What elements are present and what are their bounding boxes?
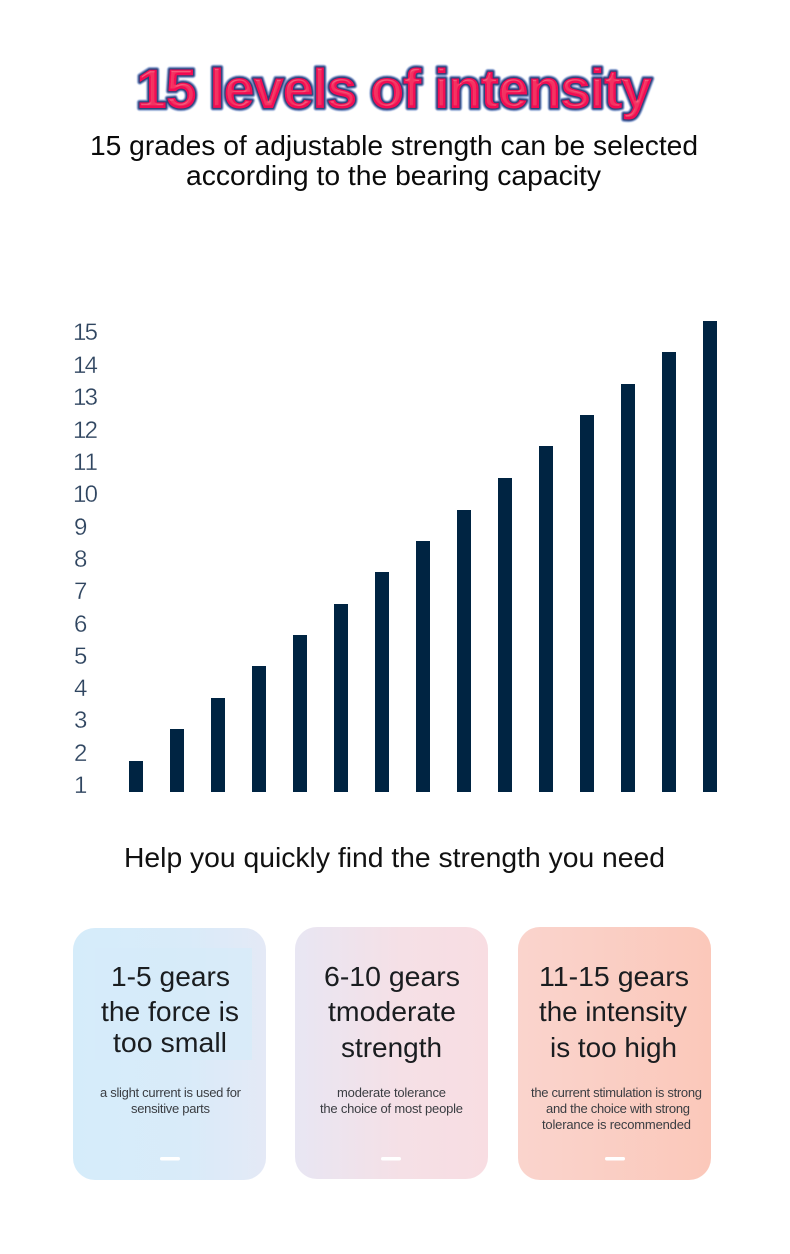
card 3 heading: is too high	[550, 1032, 677, 1063]
panel: 11-15 gears	[518, 927, 711, 1180]
y-axis labels: 9	[74, 514, 87, 541]
y-axis labels	[73, 319, 98, 799]
card 3 heading: the intensity	[539, 996, 687, 1027]
y-axis labels: 3	[74, 707, 87, 734]
card 1 heading	[101, 961, 239, 1058]
subtitle: 15 grades of adjustable strength can be selected	[90, 130, 698, 161]
subtitle: according to the bearing capacity	[186, 160, 601, 191]
card 3 description	[531, 1085, 702, 1132]
y-axis labels: 10	[73, 481, 98, 508]
title: 15 levels of intensity	[136, 57, 652, 120]
title: 15 levels of intensity	[136, 57, 652, 120]
title: 15 levels of intensity	[136, 57, 652, 120]
card 2 heading: strength	[341, 1032, 442, 1063]
card 1 pill	[160, 1157, 180, 1160]
y-axis labels: 1	[74, 772, 87, 799]
card 3 description: and the choice with strong	[546, 1101, 690, 1116]
card 2 pill	[381, 1157, 401, 1160]
card 2 description: the choice of most people	[320, 1101, 463, 1116]
card 3 description: tolerance is recommended	[542, 1117, 691, 1132]
card 1 description: sensitive parts	[131, 1101, 210, 1116]
card 3 heading	[539, 961, 689, 1063]
panel: 6-10 gears	[295, 927, 488, 1179]
section heading: Help you quickly find the strength you need	[124, 842, 665, 873]
y-axis labels: 11	[73, 449, 98, 476]
y-axis labels: 4	[74, 675, 87, 702]
card 2 description: moderate tolerance	[337, 1085, 446, 1100]
card 3 description: the current stimulation is strong	[531, 1085, 702, 1100]
y-axis labels: 15	[73, 319, 98, 346]
y-axis labels: 13	[73, 384, 98, 411]
card 1 heading: the force is	[101, 996, 239, 1027]
card 3 pill	[605, 1157, 625, 1160]
card 2 description	[320, 1085, 463, 1116]
card 1 description: a slight current is used for	[100, 1085, 242, 1100]
y-axis labels: 6	[74, 611, 87, 638]
bar chart	[129, 321, 717, 792]
card 1 heading: 1-5 gears	[111, 961, 230, 992]
panel: 1-5 gears	[73, 928, 266, 1180]
y-axis labels: 8	[74, 546, 87, 573]
y-axis labels: 5	[74, 643, 87, 670]
y-axis labels: 12	[73, 417, 98, 444]
card 1 description	[100, 1085, 242, 1116]
card 1 heading: too small	[113, 1027, 227, 1058]
y-axis labels: 14	[73, 352, 98, 379]
subtitle	[90, 130, 698, 191]
y-axis labels: 2	[74, 740, 87, 767]
card 2 heading: 6-10 gears	[324, 961, 460, 992]
card 2 heading: tmoderate	[328, 996, 456, 1027]
y-axis labels: 7	[74, 578, 87, 605]
card 2 heading	[324, 961, 460, 1063]
card 3 heading: 11-15 gears	[539, 961, 689, 992]
